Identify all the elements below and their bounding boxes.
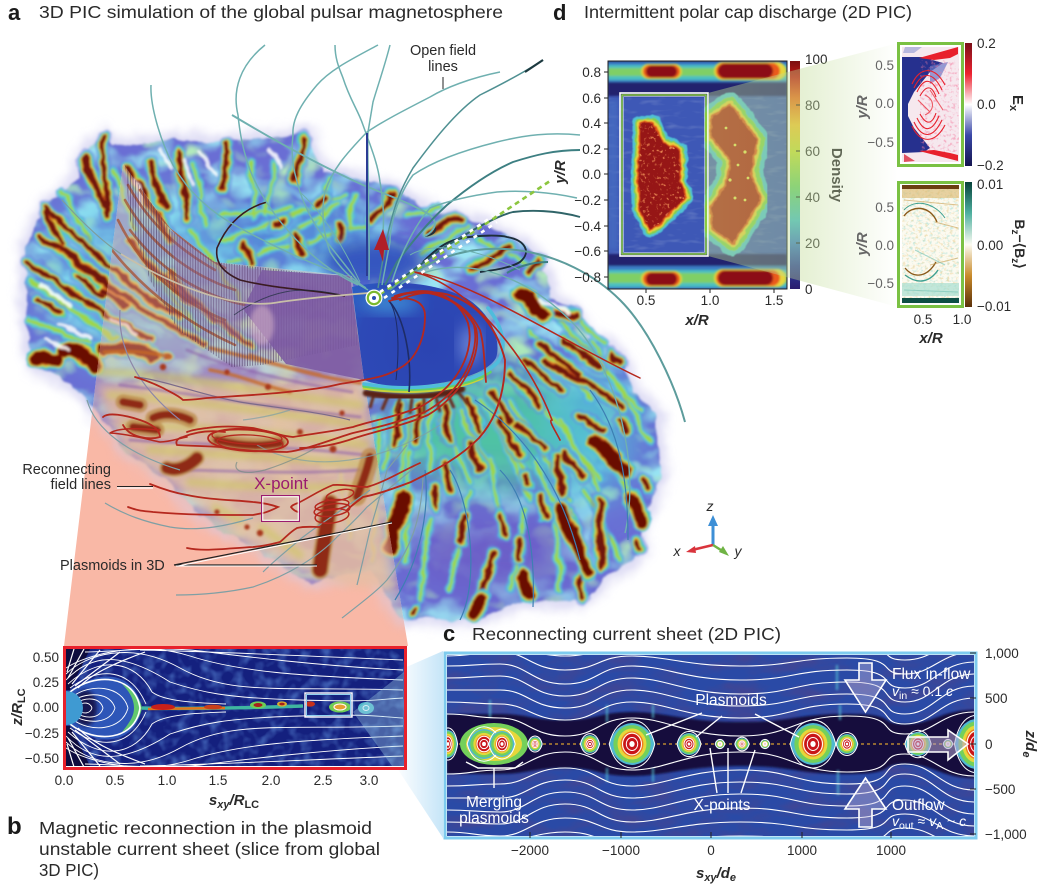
panel d: Ex map xyxy=(898,44,962,166)
title c xyxy=(443,621,781,646)
panel d: Ex colorbar and labels: 0.2 xyxy=(977,36,996,51)
top and bottom bands xyxy=(608,60,787,289)
panel c: axes: 0 xyxy=(707,843,715,858)
left blob speckle xyxy=(638,123,686,230)
labels in panel c: v xyxy=(892,683,899,699)
panel d: Bz colorbar and labels: −⟨B xyxy=(1012,234,1028,258)
panel d: axis labels: −0.2 xyxy=(574,193,601,208)
panel d: axis labels: y/R xyxy=(552,160,569,185)
panel d: Bz colorbar and labels: z xyxy=(1009,258,1020,263)
density colorbar: 40 xyxy=(805,190,820,205)
sheet line xyxy=(447,743,974,745)
panel a: 3D magnetosphere xyxy=(22,43,742,646)
panel d: selection box xyxy=(620,93,708,256)
dashed line of sight to polar cap xyxy=(380,181,550,298)
panel d: Bz colorbar and labels: 0.01 xyxy=(977,177,1003,192)
labels in panel c: Plasmoids xyxy=(695,692,767,709)
panel b: axes: 0.50 xyxy=(33,650,59,665)
cyan filaments xyxy=(490,665,840,795)
label: reconnecting field lines: field lines xyxy=(51,477,111,493)
wedge interior: washed bands and plasmoid spots xyxy=(96,185,392,590)
panel c: axes: e xyxy=(730,872,736,884)
panel d: Ex colorbar and labels: x xyxy=(1007,105,1019,112)
title c: Reconnecting current sheet (2D PIC) xyxy=(472,624,781,644)
outflow horizontal arrow xyxy=(908,730,968,760)
labels in panel c: Outflow xyxy=(892,797,945,814)
panel d: axis labels: 1.0 xyxy=(701,293,719,308)
xyz axes triad: z xyxy=(706,498,714,514)
panel d: axis labels: 0.5 xyxy=(637,293,655,308)
panel c: axes: −1,000 xyxy=(985,827,1027,842)
xyz axes triad: y xyxy=(734,543,742,559)
density colorbar: 0 xyxy=(805,282,813,297)
panel d: Bz colorbar and labels: B xyxy=(1012,219,1028,229)
panel d: Bz colorbar and labels: 0.0 xyxy=(875,238,894,253)
labels in panel c: plasmoids xyxy=(459,810,529,827)
panel d: Bz colorbar and labels: x/R xyxy=(918,330,943,347)
title c: c xyxy=(443,621,455,646)
panel b: axes: 0.00 xyxy=(33,700,59,715)
title b: Magnetic reconnection in the plasmoid xyxy=(39,818,372,838)
xyz axes triad: x xyxy=(672,543,682,559)
dark polar regions xyxy=(66,649,90,766)
panel d: Bz colorbar and labels: −0.5 xyxy=(867,276,894,291)
panel d: Bz colorbar and labels: y/R xyxy=(854,232,871,257)
panel d: Bz colorbar and labels: 0.5 xyxy=(914,312,932,327)
panel b: axes: LC xyxy=(244,799,259,811)
title b: 3D PIC) xyxy=(39,860,99,880)
pale highlight on slice xyxy=(250,305,274,345)
pale blue wedge between b and c xyxy=(395,651,443,838)
panel b: axes: xy xyxy=(216,799,230,811)
panel c: ticks xyxy=(530,653,976,838)
labels in panel c: A xyxy=(936,820,943,832)
labels in panel c: c xyxy=(946,683,953,699)
panel b: axes: 2.0 xyxy=(262,773,280,788)
rear blue polar region xyxy=(320,240,424,284)
panel b: axes: 1.5 xyxy=(209,773,227,788)
pale translucent slice on the right xyxy=(353,672,404,766)
reconnecting red field lines xyxy=(103,272,640,550)
panel c: axes: −500 xyxy=(985,782,1015,797)
dark closed field lines xyxy=(217,202,526,392)
panel d: Ex colorbar and labels: 0.5 xyxy=(875,58,894,73)
panel c: axes: /d xyxy=(716,865,731,882)
dark lens around sheet xyxy=(447,710,975,778)
lower field lines xyxy=(87,310,628,620)
flux in-flow arrow xyxy=(845,663,886,712)
labels in panel c: out xyxy=(899,820,914,832)
panel c: axes xyxy=(511,646,1039,884)
label: X-point: X-point xyxy=(254,474,308,493)
labels in panel c: in xyxy=(899,690,907,702)
panel c: axes: s xyxy=(696,865,704,882)
labels in panel c: c xyxy=(959,813,966,829)
near-side blue dome xyxy=(352,283,503,414)
zoom box xyxy=(305,693,352,717)
label: open field lines: lines xyxy=(428,59,458,75)
open field lines xyxy=(62,45,685,533)
labels in panel c: ≈ xyxy=(914,813,929,829)
red spin arrow xyxy=(374,229,389,262)
labels in panel c xyxy=(459,666,971,832)
labels in panel c: v xyxy=(892,813,899,829)
title a: 3D PIC simulation of the global pulsar magnetosphere xyxy=(39,2,503,22)
label: open field lines: Open field xyxy=(410,43,476,59)
label: reconnecting field lines xyxy=(22,462,153,493)
panel d: Ex colorbar and labels: −0.2 xyxy=(977,158,1004,173)
xyz axes triad xyxy=(672,498,742,559)
title b: b xyxy=(7,813,22,840)
panel d: Ex colorbar and labels: 0.0 xyxy=(875,96,894,111)
panel d: axis labels: 0.0 xyxy=(582,167,601,182)
labels in panel c: X-points xyxy=(694,797,751,814)
panel d: Ex colorbar and labels: y/R xyxy=(854,95,871,120)
panel d: axis labels: x/R xyxy=(684,312,709,329)
panel d: axis labels: −0.8 xyxy=(574,270,601,285)
panel d: axis labels: 0.6 xyxy=(582,91,601,106)
panel d: Bz colorbar and labels: 0.5 xyxy=(875,200,894,215)
panel d: Bz colorbar and labels: −0.01 xyxy=(977,299,1011,314)
panel c: axes: 1000 xyxy=(876,843,906,858)
density colorbar: 60 xyxy=(805,144,820,159)
hatched current-sheet slice xyxy=(125,165,358,367)
purple slice face xyxy=(243,270,364,380)
label: X-point xyxy=(254,474,308,522)
panel d: Bz colorbar and labels: ⟩ xyxy=(1012,263,1028,269)
outflow vertical arrow xyxy=(845,778,886,827)
plasmoids xyxy=(438,715,998,773)
labels in panel c: v xyxy=(929,813,936,829)
field lines xyxy=(66,649,403,767)
panel b: axes: 0.0 xyxy=(55,773,73,788)
panel b: axes: LC xyxy=(16,688,28,703)
green zoom wedge xyxy=(708,43,898,307)
labels in panel c: ≈ 0.1 xyxy=(907,683,946,699)
labels in panel c: Merging xyxy=(466,794,522,811)
left red blob xyxy=(638,123,686,230)
title d: d xyxy=(553,0,566,25)
panel b: axes: 0.5 xyxy=(106,773,124,788)
panel d: Bz colorbar and labels xyxy=(854,177,1028,347)
label: plasmoids in 3D: Plasmoids in 3D xyxy=(60,558,165,574)
panel b: axes: 2.5 xyxy=(314,773,332,788)
density disc xyxy=(25,134,663,620)
label: reconnecting field lines: Reconnecting xyxy=(22,462,111,478)
pulsar marker xyxy=(366,290,382,306)
panel b: axes: −0.50 xyxy=(25,751,59,766)
panel d: axis labels: 0.4 xyxy=(582,116,601,131)
label: open field lines xyxy=(410,43,476,89)
field lines above and below sheet xyxy=(447,655,974,836)
title d: Intermittent polar cap discharge (2D PIC) xyxy=(584,2,912,22)
panel d: Bz colorbar and labels: 1.0 xyxy=(953,312,971,327)
panel b: axes: z/R xyxy=(9,703,26,726)
panel d: Ex colorbar and labels: −0.5 xyxy=(867,135,894,150)
panel c: axes: xy xyxy=(703,872,717,884)
panel d: Ex colorbar and labels: E xyxy=(1009,95,1026,105)
panel b: axes: −0.25 xyxy=(25,726,59,741)
panel d: Bz map xyxy=(898,182,962,306)
density colorbar: 20 xyxy=(805,236,820,251)
axis line of rotation xyxy=(366,133,368,276)
closed zone fill xyxy=(72,676,142,740)
right blob bright dots xyxy=(725,127,749,201)
salmon slice wedge xyxy=(64,164,408,646)
dark end of open field line xyxy=(525,60,543,72)
panel d: polar cap density heat map xyxy=(608,60,787,289)
labels in panel c: Flux in-flow xyxy=(892,666,971,683)
density colorbar: 100 xyxy=(805,52,828,67)
density colorbar xyxy=(790,52,845,297)
panel c: axes: 500 xyxy=(985,691,1008,706)
panel d: axis labels xyxy=(552,65,783,329)
red blobs in bands xyxy=(641,62,786,287)
density colorbar: 80 xyxy=(805,98,820,113)
panel b: axes: /R xyxy=(228,792,245,809)
panel c: axes: −2000 xyxy=(511,843,549,858)
panel c: axes: 1,000 xyxy=(985,646,1019,661)
panel d: Bz colorbar and labels: z xyxy=(1009,229,1020,234)
panel c: axes: −1000 xyxy=(602,843,640,858)
label: plasmoids in 3D xyxy=(60,522,392,574)
panel b: axes: s xyxy=(209,792,217,809)
sheet xyxy=(142,701,374,714)
panel b: axes xyxy=(9,650,378,811)
mesh veil xyxy=(170,230,262,340)
labels in panel c: ~ xyxy=(943,813,959,829)
title a: a xyxy=(8,0,21,25)
panel d: Ex colorbar and labels xyxy=(854,36,1026,173)
panel d: axis labels: −0.6 xyxy=(574,244,601,259)
title b: unstable current sheet (slice from global xyxy=(39,839,380,859)
panel d: axis labels: 0.8 xyxy=(582,65,601,80)
panel d: axis labels: −0.4 xyxy=(574,219,601,234)
panel d: axis labels: 1.5 xyxy=(765,293,783,308)
density colorbar: Density xyxy=(828,148,845,203)
panel d: Ex colorbar and labels: 0.0 xyxy=(977,97,996,112)
panel c: axes: 0 xyxy=(985,737,993,752)
panel c: reconnecting current sheet xyxy=(444,652,978,840)
panel c: axes: e xyxy=(1020,751,1032,757)
panel b: axes: 3.0 xyxy=(360,773,378,788)
panel b: axes: 0.25 xyxy=(33,675,59,690)
title b xyxy=(7,813,380,880)
panel c: axes: 1000 xyxy=(787,843,817,858)
right red blob xyxy=(712,105,760,243)
panel b: axes: 1.0 xyxy=(158,773,176,788)
panel b: current sheet slice xyxy=(64,648,406,768)
panel d: Bz colorbar and labels: 0.00 xyxy=(977,238,1003,253)
title a xyxy=(8,0,503,25)
panel c: axes: z/d xyxy=(1022,731,1039,751)
star disc xyxy=(66,691,83,725)
panel d: axis labels: 0.2 xyxy=(582,142,601,157)
